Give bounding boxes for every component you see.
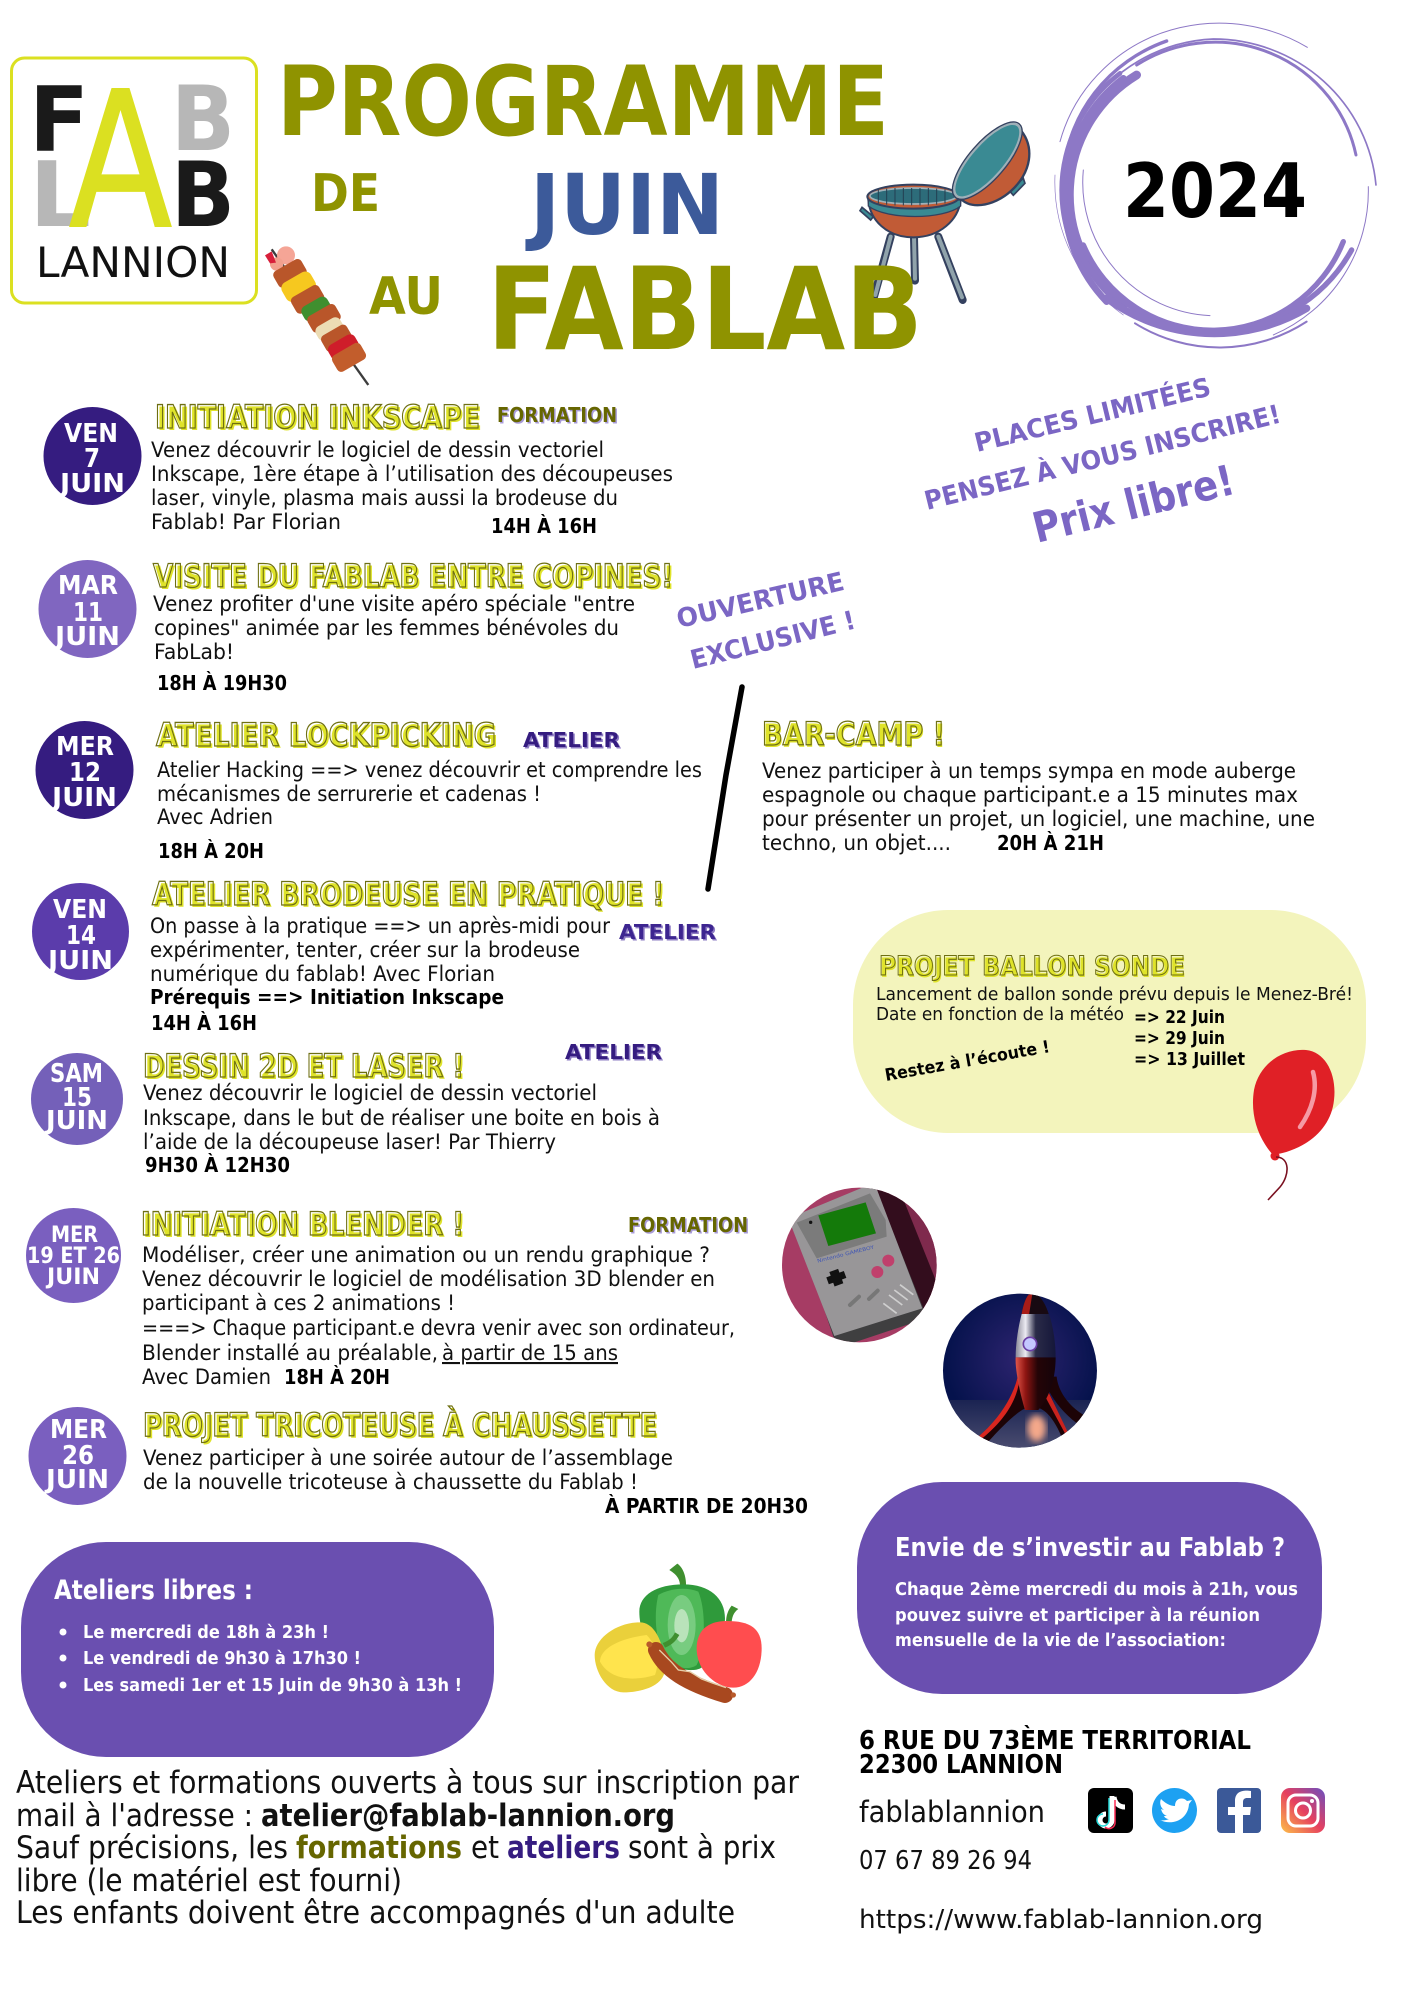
logo: Fablab Lannion: A xyxy=(69,52,172,271)
text block: inscription: Les enfants doivent être accompagnés d'un adulte xyxy=(16,1895,735,1931)
date badge: VEN xyxy=(64,419,118,449)
callout: ouverture exclusive: OUVERTURE xyxy=(674,567,847,635)
description: laser, vinyle, plasma mais aussi la brodeuse du xyxy=(151,486,618,510)
image: rocket xyxy=(942,1293,1098,1450)
text block: address xyxy=(859,1724,1251,1780)
description: Chaque 2ème mercredi du mois à 21h, vous xyxy=(895,1579,1298,1600)
description: Avec Damien xyxy=(142,1365,271,1389)
date badge: 26 xyxy=(62,1441,94,1471)
title: ATELIER LOCKPICKING xyxy=(158,718,498,756)
time: 18H À 19H30 xyxy=(157,671,287,695)
date badge: VEN xyxy=(53,895,107,925)
tag: atelier: ATELIER xyxy=(620,922,718,946)
date badge: JUIN xyxy=(45,1265,100,1290)
text block: inscription: mail à l'adresse : xyxy=(16,1798,253,1834)
date badge: MER xyxy=(50,1415,107,1445)
description: Venez découvrir le logiciel de modélisation 3D blender en xyxy=(142,1267,715,1291)
description: Fablab! Par Florian xyxy=(151,510,341,534)
title: BAR-CAMP ! xyxy=(763,717,946,755)
icon: red balloon xyxy=(1253,1050,1334,1200)
description: pour présenter un projet, un logiciel, une machine, une xyxy=(762,807,1315,831)
heading: Ateliers libres : xyxy=(54,1575,253,1606)
description: à partir de 15 ans xyxy=(442,1341,618,1365)
date badge xyxy=(38,560,136,658)
description: techno, un objet.... xyxy=(762,831,951,855)
description: Modéliser, créer une animation ou un rendu graphique ? xyxy=(142,1243,710,1267)
title: PROJET BALLON SONDE xyxy=(879,951,1185,982)
date badge: JUIN xyxy=(44,1106,108,1136)
panel: ateliers libres xyxy=(21,1542,494,1757)
event: projet tricoteuse xyxy=(28,1406,808,1518)
description: Blender installé au préalable, xyxy=(142,1341,438,1365)
heading: DE: DE xyxy=(311,164,380,224)
time: 18H À 20H xyxy=(158,839,264,863)
description: FabLab! xyxy=(154,640,234,664)
heading: JUIN: JUIN xyxy=(525,156,724,254)
icon: instagram xyxy=(1281,1788,1325,1833)
date badge: 19 ET 26 xyxy=(27,1244,120,1269)
description xyxy=(895,1579,1298,1651)
date badge xyxy=(28,1407,126,1505)
text block: address: 22300 LANNION xyxy=(859,1750,1063,1780)
description: Venez découvrir le logiciel de dessin vectoriel xyxy=(151,438,604,462)
list: Le vendredi de 9h30 à 17h30 ! xyxy=(83,1648,361,1669)
title: VISITE DU FABLAB ENTRE COPINES! xyxy=(155,559,675,597)
title: ATELIER BRODEUSE EN PRATIQUE ! xyxy=(154,877,666,915)
description: Inkscape, 1ère étape à l’utilisation des découpeuses xyxy=(151,462,673,486)
date badge xyxy=(36,721,134,819)
divider slash xyxy=(708,687,742,889)
icon: barbecue grill xyxy=(860,112,1033,300)
description: Venez participer à un temps sympa en mode auberge xyxy=(762,759,1296,783)
text block: inscription: et xyxy=(471,1830,499,1866)
date badge: SAM xyxy=(50,1059,103,1089)
title: DESSIN 2D ET LASER ! xyxy=(143,1047,464,1085)
text: fablablannion: fablablannion xyxy=(859,1795,1045,1829)
title: INITIATION BLENDER ! xyxy=(141,1205,464,1243)
logo: Fablab Lannion: B xyxy=(171,143,235,248)
description xyxy=(157,758,702,829)
description: Venez participer à une soirée autour de l’assemblage xyxy=(143,1446,673,1470)
text block: inscription: atelier@fablab-lannion.org xyxy=(261,1798,675,1834)
date badge xyxy=(26,1208,121,1303)
event: visite du fablab xyxy=(38,557,675,695)
time: 14H À 16H xyxy=(151,1011,257,1035)
heading: PROGRAMME: PROGRAMME xyxy=(277,46,889,158)
description: Venez découvrir le logiciel de dessin vectoriel xyxy=(143,1081,597,1105)
time: 9H30 À 12H30 xyxy=(145,1153,290,1177)
description: Inkscape, dans le but de réaliser une boite en bois à xyxy=(143,1106,660,1130)
description: espagnole ou chaque participant.e a 15 minutes max xyxy=(762,783,1298,807)
time: 20H À 21H xyxy=(997,831,1104,855)
description: mensuelle de la vie de l’association: xyxy=(895,1630,1226,1651)
description xyxy=(151,438,673,534)
description: Atelier Hacking ==> venez découvrir et comprendre les xyxy=(157,758,702,782)
date badge: JUIN xyxy=(53,622,120,652)
date badge: 14 xyxy=(66,921,96,951)
description: Prérequis ==> Initiation Inkscape xyxy=(150,985,504,1009)
date badge: 15 xyxy=(62,1083,92,1113)
image: game boy xyxy=(782,1188,937,1342)
description: l’aide de la découpeuse laser! Par Thierry xyxy=(143,1130,556,1154)
description: ===> Chaque participant.e devra venir avec son ordinateur, xyxy=(142,1316,735,1340)
dates: => 13 Juillet xyxy=(1134,1049,1245,1070)
callout: places limitees: PLACES LIMITÉES xyxy=(971,371,1214,459)
text block: inscription: libre (le matériel est fourni) xyxy=(16,1863,402,1899)
date badge: MER xyxy=(51,1223,98,1248)
tag: atelier: ATELIER xyxy=(565,1040,662,1064)
tag: formation: FORMATION xyxy=(630,1214,750,1238)
text block: inscription xyxy=(16,1765,799,1931)
text block: inscription: Ateliers et formations ouverts à tous sur inscription par xyxy=(16,1765,799,1801)
description: Venez profiter d'une visite apéro spéciale "entre xyxy=(153,592,635,616)
list: Les samedi 1er et 15 Juin de 9h30 à 13h ! xyxy=(83,1675,462,1696)
list: Le mercredi de 18h à 23h ! xyxy=(83,1622,329,1643)
date badge: MAR xyxy=(58,571,118,601)
callout: ouverture exclusive: EXCLUSIVE ! xyxy=(687,606,859,676)
heading: 2024: 2024 xyxy=(1123,147,1307,235)
date badge: JUIN xyxy=(58,469,125,499)
event: initiation inkscape xyxy=(44,398,673,538)
title: VISITE DU FABLAB ENTRE COPINES! xyxy=(153,557,673,595)
description: copines" animée par les femmes bénévoles du xyxy=(154,616,619,640)
description xyxy=(143,1446,673,1494)
time: À PARTIR DE 20H30 xyxy=(605,1494,808,1518)
text block: address: 6 RUE DU 73ÈME TERRITORIAL xyxy=(859,1724,1251,1756)
text: phone: 07 67 89 26 94 xyxy=(859,1846,1032,1876)
logo: Fablab Lannion: LANNION xyxy=(36,238,230,287)
date badge: 12 xyxy=(69,758,101,788)
dates: => 29 Juin xyxy=(1134,1028,1225,1049)
description xyxy=(143,1081,660,1154)
date badge: 7 xyxy=(84,444,100,474)
callout: ouverture exclusive xyxy=(674,567,859,676)
icon: facebook xyxy=(1217,1788,1261,1833)
icon: peppers and sausage xyxy=(595,1564,762,1698)
tag: atelier: ATELIER xyxy=(524,730,622,754)
description xyxy=(150,914,610,1009)
title: PROJET BALLON SONDE xyxy=(880,953,1186,984)
time: 14H À 16H xyxy=(491,514,597,538)
panel: envie de s'investir xyxy=(857,1482,1322,1694)
event: atelier lockpicking xyxy=(36,716,702,863)
heading: Envie de s’investir au Fablab ? xyxy=(895,1533,1285,1563)
logo: Fablab Lannion: F xyxy=(29,68,89,173)
tag: formation: FORMATION xyxy=(498,404,618,428)
date badge xyxy=(31,1053,123,1145)
callout: restez a l'ecoute: Restez à l’écoute ! xyxy=(883,1037,1051,1086)
text block: inscription: ateliers xyxy=(507,1830,620,1866)
icon: twitter xyxy=(1152,1788,1197,1833)
date badge xyxy=(44,407,142,505)
heading: FABLAB: FABLAB xyxy=(487,243,923,376)
tag: atelier: ATELIER xyxy=(523,728,620,752)
description: expérimenter, tenter, créer sur la brodeuse xyxy=(150,938,580,962)
icon: tiktok xyxy=(1088,1788,1133,1833)
date badge xyxy=(32,883,129,980)
description xyxy=(142,1243,735,1389)
title: DESSIN 2D ET LASER ! xyxy=(145,1049,466,1087)
logo: Fablab Lannion: B xyxy=(171,67,235,172)
callout: places limitees: PENSEZ À VOUS INSCRIRE! xyxy=(921,398,1284,517)
text: website: https://www.fablab-lannion.org xyxy=(859,1905,1263,1935)
description: pouvez suivre et participer à la réunion xyxy=(895,1605,1260,1626)
dates xyxy=(1134,1007,1245,1070)
description: Lancement de ballon sonde prévu depuis le Menez-Bré! xyxy=(876,984,1353,1005)
logo: Fablab Lannion xyxy=(12,52,256,303)
date badge: JUIN xyxy=(50,783,117,813)
title: BAR-CAMP ! xyxy=(762,715,945,753)
tag: atelier: ATELIER xyxy=(566,1042,664,1066)
title: ATELIER BRODEUSE EN PRATIQUE ! xyxy=(152,875,664,913)
text block: inscription: formations xyxy=(296,1830,462,1866)
callout: places limitees: Prix libre! xyxy=(1028,455,1239,553)
callout: places limitees xyxy=(921,371,1284,553)
title: PROJET TRICOTEUSE À CHAUSSETTE xyxy=(143,1406,657,1444)
description: de la nouvelle tricoteuse à chaussette du Fablab ! xyxy=(143,1470,638,1494)
tag: formation: FORMATION xyxy=(497,403,617,427)
date badge: MER xyxy=(56,732,114,762)
tag: formation: FORMATION xyxy=(628,1213,748,1237)
description xyxy=(153,592,635,664)
list xyxy=(60,1622,462,1696)
time: 18H À 20H xyxy=(284,1365,390,1389)
title: INITIATION BLENDER ! xyxy=(143,1207,466,1245)
event: bar-camp xyxy=(762,715,1315,855)
tag: atelier: ATELIER xyxy=(619,920,716,944)
event: dessin 2D et laser xyxy=(31,1040,664,1177)
logo: Fablab Lannion: L xyxy=(29,143,91,248)
title: INITIATION INKSCAPE xyxy=(155,398,480,436)
icon: skewer xyxy=(265,246,368,385)
description: Date en fonction de la météo xyxy=(876,1004,1124,1025)
title: INITIATION INKSCAPE xyxy=(157,400,482,438)
event: initiation blender xyxy=(26,1205,750,1389)
title: PROJET TRICOTEUSE À CHAUSSETTE xyxy=(145,1408,659,1446)
description: numérique du fablab! Avec Florian xyxy=(150,962,495,986)
description: participant à ces 2 animations ! xyxy=(142,1291,455,1315)
description xyxy=(762,759,1315,855)
date badge: 11 xyxy=(73,598,103,628)
image: game boy: Nintendo GAMEBOY xyxy=(817,1244,876,1265)
date badge: JUIN xyxy=(44,1465,109,1495)
title: ATELIER LOCKPICKING xyxy=(156,716,496,754)
icon: purple brush circle xyxy=(1055,23,1376,347)
heading: AU: AU xyxy=(369,267,443,327)
description: mécanismes de serrurerie et cadenas ! xyxy=(157,782,541,806)
description: Avec Adrien xyxy=(157,805,273,829)
description xyxy=(876,984,1353,1025)
event: atelier brodeuse xyxy=(32,875,718,1035)
panel: projet ballon sonde xyxy=(853,910,1366,1133)
description: On passe à la pratique ==> un après-midi pour xyxy=(150,914,610,938)
date badge: JUIN xyxy=(46,946,113,976)
text block: inscription: Sauf précisions, les xyxy=(16,1830,288,1866)
text block: inscription: sont à prix xyxy=(628,1830,776,1866)
dates: => 22 Juin xyxy=(1134,1007,1225,1028)
